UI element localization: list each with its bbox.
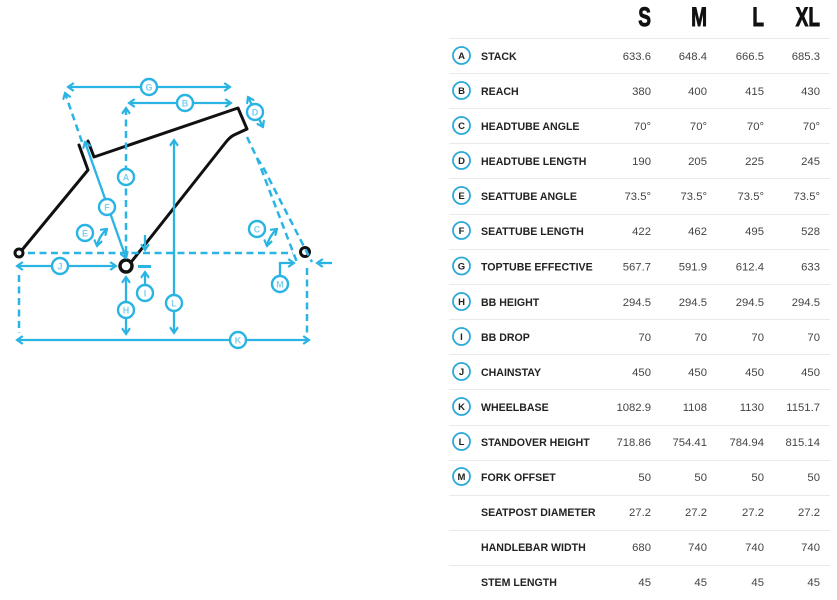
row: seattube length: 462 bbox=[688, 226, 707, 238]
row: reach: 430 bbox=[801, 86, 820, 98]
row: headtube length: 225 bbox=[745, 156, 764, 168]
row: chainstay: 450 bbox=[801, 367, 820, 379]
row: stack: STACK bbox=[481, 51, 517, 63]
row: fork offset: 50 bbox=[694, 472, 707, 484]
dimension D: headtube length: D bbox=[252, 108, 259, 118]
row: chainstay: 450 bbox=[632, 367, 651, 379]
row: seattube length: F bbox=[459, 226, 465, 237]
row: BB drop: 70 bbox=[694, 332, 707, 344]
row: fork offset: 50 bbox=[807, 472, 820, 484]
row: chainstay: CHAINSTAY bbox=[481, 367, 541, 379]
dimension E: seattube angle: E bbox=[82, 228, 88, 238]
row: fork offset: FORK OFFSET bbox=[481, 472, 556, 484]
dimension C: headtube angle: C bbox=[254, 224, 261, 234]
dimension I: BB drop: I bbox=[144, 288, 146, 298]
row: BB drop: 70 bbox=[751, 332, 764, 344]
row: BB drop: I bbox=[460, 332, 463, 343]
row: seatpost diameter: 27.2 bbox=[742, 507, 764, 519]
row: BB drop: BB DROP bbox=[481, 332, 530, 344]
row: headtube angle: 70° bbox=[803, 121, 820, 133]
row: seatpost diameter bbox=[481, 507, 820, 519]
row: toptube effective bbox=[453, 258, 820, 274]
row: seattube angle: 73.5° bbox=[737, 191, 764, 203]
row: headtube length: 205 bbox=[688, 156, 707, 168]
row: standover height: 754.41 bbox=[672, 437, 707, 449]
row: handlebar width: 740 bbox=[745, 542, 764, 554]
row: headtube length: D bbox=[458, 156, 465, 167]
row: standover height: L bbox=[459, 437, 465, 448]
row: fork offset: M bbox=[458, 472, 466, 483]
row: stem length bbox=[481, 577, 820, 589]
row: BB height: 294.5 bbox=[792, 297, 820, 309]
row: toptube effective: 567.7 bbox=[623, 262, 651, 274]
dimension A: stack bbox=[118, 108, 134, 253]
row: wheelbase: K bbox=[458, 402, 465, 413]
row: seatpost diameter: SEATPOST DIAMETER bbox=[481, 507, 596, 519]
size column headings bbox=[638, 2, 820, 32]
row: stem length: 45 bbox=[807, 577, 820, 589]
row: toptube effective: 612.4 bbox=[736, 262, 764, 274]
dimension K: wheelbase: K bbox=[235, 336, 242, 346]
row: stem length: 45 bbox=[694, 577, 707, 589]
dimension B: reach: B bbox=[182, 98, 189, 108]
dimension H: BB height: H bbox=[123, 306, 129, 316]
row: wheelbase: WHEELBASE bbox=[481, 402, 549, 414]
row: chainstay: 450 bbox=[688, 367, 707, 379]
row: reach: 400 bbox=[688, 86, 707, 98]
row: handlebar width: 740 bbox=[688, 542, 707, 554]
row: chainstay bbox=[453, 363, 820, 380]
row: reach bbox=[453, 82, 820, 99]
row: fork offset: 50 bbox=[638, 472, 651, 484]
dimension H: BB height bbox=[118, 277, 134, 334]
size column headings: XL bbox=[796, 2, 820, 32]
row: standover height: 815.14 bbox=[785, 437, 820, 449]
row: BB height: 294.5 bbox=[679, 297, 707, 309]
row: stack: 633.6 bbox=[623, 51, 651, 63]
row: toptube effective: 591.9 bbox=[679, 262, 707, 274]
row: toptube effective: 633 bbox=[801, 262, 820, 274]
row: wheelbase: 1082.9 bbox=[616, 402, 651, 414]
row: headtube angle: 70° bbox=[747, 121, 764, 133]
row: stack: A bbox=[458, 51, 465, 62]
row: stack: 666.5 bbox=[736, 51, 764, 63]
geometry table bbox=[449, 38, 830, 589]
row: standover height: STANDOVER HEIGHT bbox=[481, 437, 590, 449]
dimension K: wheelbase bbox=[17, 268, 309, 348]
size column headings: L bbox=[752, 2, 764, 32]
row: seatpost diameter: 27.2 bbox=[798, 507, 820, 519]
row: stem length: 45 bbox=[638, 577, 651, 589]
row: fork offset: 50 bbox=[751, 472, 764, 484]
row: seattube angle: 73.5° bbox=[793, 191, 820, 203]
row: seattube angle: SEATTUBE ANGLE bbox=[481, 191, 577, 203]
row: chainstay: 450 bbox=[745, 367, 764, 379]
row: reach: REACH bbox=[481, 86, 519, 98]
row: BB height: 294.5 bbox=[736, 297, 764, 309]
row: wheelbase: 1108 bbox=[683, 402, 707, 414]
row: wheelbase: 1151.7 bbox=[786, 402, 820, 414]
dimension F: seattube length bbox=[65, 93, 126, 258]
row: BB height: H bbox=[458, 297, 465, 308]
row: headtube length: HEADTUBE LENGTH bbox=[481, 156, 586, 168]
dimension M: fork offset bbox=[272, 263, 332, 292]
row: headtube angle: 70° bbox=[690, 121, 707, 133]
dimension M: fork offset: M bbox=[276, 280, 284, 290]
bike frame bbox=[15, 108, 310, 272]
row: handlebar width: 680 bbox=[632, 542, 651, 554]
row: wheelbase bbox=[453, 398, 820, 415]
size column headings: M bbox=[691, 2, 707, 32]
row: handlebar width: 740 bbox=[801, 542, 820, 554]
dimension C: headtube angle bbox=[249, 221, 277, 246]
dimension G: toptube effective bbox=[68, 79, 230, 95]
row: handlebar width bbox=[481, 542, 820, 554]
row: headtube angle: 70° bbox=[634, 121, 651, 133]
row: seattube length: 422 bbox=[632, 226, 651, 238]
dimension F: seattube length: F bbox=[104, 202, 110, 212]
dimension A: stack: A bbox=[123, 172, 130, 182]
row: stem length: STEM LENGTH bbox=[481, 577, 557, 589]
row: seattube angle: 73.5° bbox=[624, 191, 651, 203]
row: headtube length bbox=[453, 152, 820, 169]
row: headtube length: 190 bbox=[632, 156, 651, 168]
row: wheelbase: 1130 bbox=[740, 402, 764, 414]
dimension B: reach bbox=[129, 95, 231, 111]
dimension L: standover height bbox=[166, 140, 182, 333]
dimension J: chainstay: J bbox=[57, 262, 63, 272]
row: headtube length: 245 bbox=[801, 156, 820, 168]
row: headtube angle: C bbox=[458, 121, 465, 132]
row: seattube length bbox=[453, 222, 820, 239]
row: seattube angle bbox=[453, 187, 820, 204]
row: standover height: 718.86 bbox=[616, 437, 651, 449]
row: BB drop bbox=[453, 328, 820, 345]
row: seattube angle: E bbox=[458, 191, 465, 202]
row: stack bbox=[453, 47, 820, 64]
row: headtube angle: HEADTUBE ANGLE bbox=[481, 121, 579, 133]
row: BB height bbox=[453, 293, 820, 310]
dimension D: headtube length bbox=[247, 97, 263, 127]
row: stack: 648.4 bbox=[679, 51, 707, 63]
row: seattube angle: 73.5° bbox=[680, 191, 707, 203]
row: seattube length: 495 bbox=[745, 226, 764, 238]
row: standover height bbox=[453, 433, 820, 450]
row: BB drop: 70 bbox=[638, 332, 651, 344]
row: headtube angle bbox=[453, 117, 820, 134]
row: seatpost diameter: 27.2 bbox=[629, 507, 651, 519]
size column headings: S bbox=[638, 2, 651, 32]
dimension E: seattube angle bbox=[77, 225, 107, 246]
row: BB drop: 70 bbox=[807, 332, 820, 344]
row: BB height: BB HEIGHT bbox=[481, 297, 540, 309]
row: handlebar width: HANDLEBAR WIDTH bbox=[481, 542, 586, 554]
row: chainstay: J bbox=[459, 367, 464, 378]
row: seattube length: 528 bbox=[801, 226, 820, 238]
row: stack: 685.3 bbox=[792, 51, 820, 63]
row: seatpost diameter: 27.2 bbox=[685, 507, 707, 519]
row: fork offset bbox=[453, 468, 820, 485]
row: reach: 415 bbox=[745, 86, 764, 98]
row: stem length: 45 bbox=[751, 577, 764, 589]
dimension I: BB drop bbox=[137, 235, 153, 301]
row: toptube effective: G bbox=[458, 262, 465, 272]
horizontal axle reference line bbox=[28, 252, 293, 254]
dimension G: toptube effective: G bbox=[145, 82, 153, 92]
row: BB height: 294.5 bbox=[623, 297, 651, 309]
dimension J: chainstay bbox=[17, 258, 116, 274]
bike geometry diagram bbox=[15, 79, 332, 348]
row: toptube effective: TOPTUBE EFFECTIVE bbox=[481, 262, 593, 274]
row: seattube length: SEATTUBE LENGTH bbox=[481, 226, 584, 238]
dimension L: standover height: L bbox=[171, 298, 177, 308]
fork axis dashed lines bbox=[247, 137, 312, 265]
row: standover height: 784.94 bbox=[729, 437, 764, 449]
row: reach: B bbox=[458, 86, 465, 97]
row: reach: 380 bbox=[632, 86, 651, 98]
